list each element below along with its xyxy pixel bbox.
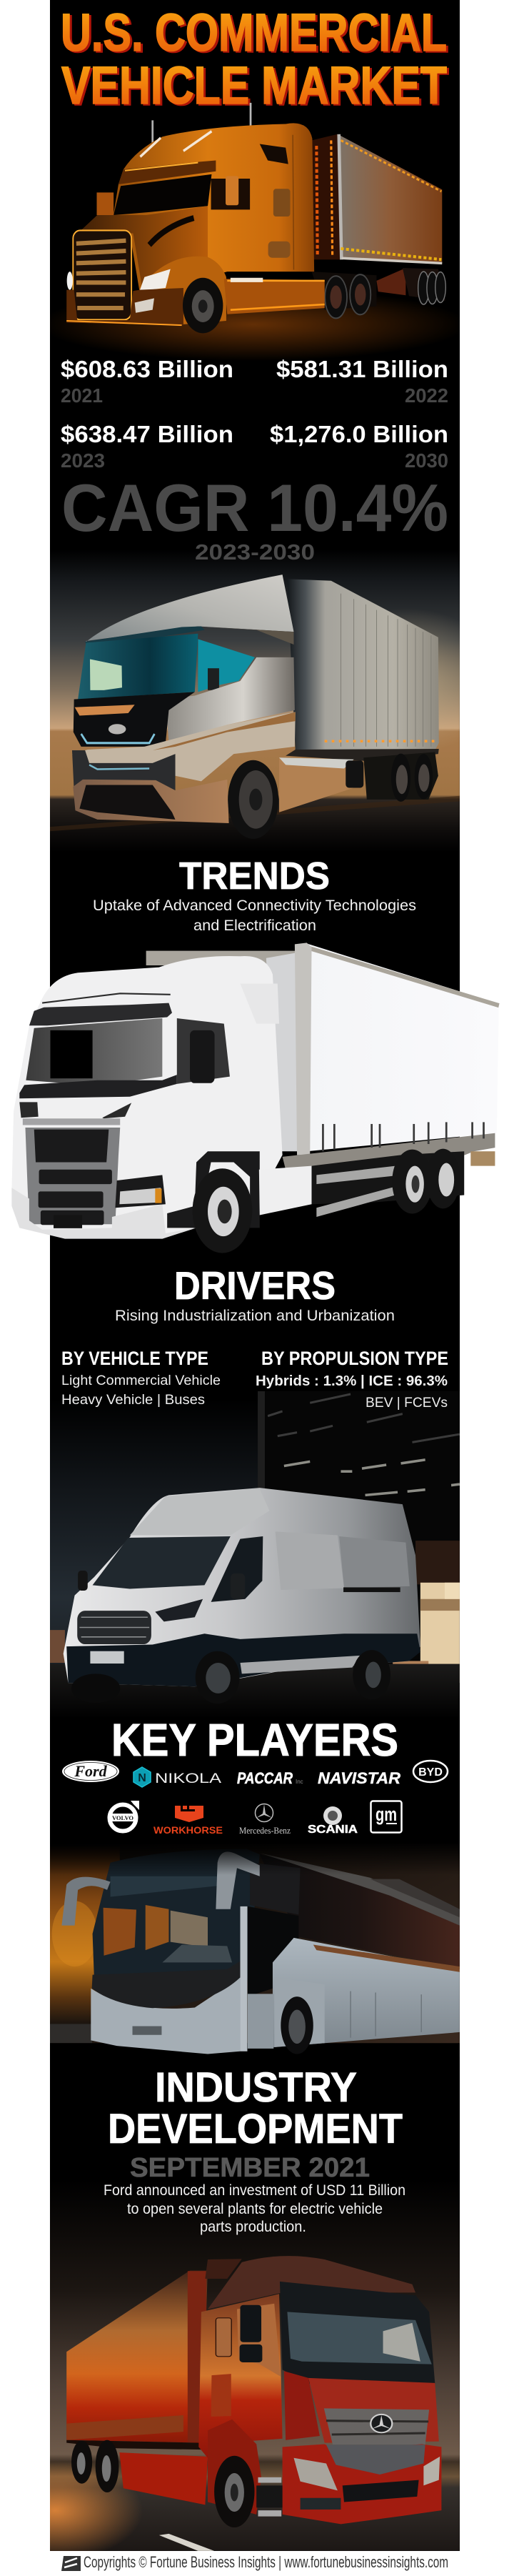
logo: Paccar: Inc (296, 1779, 303, 1785)
stat: 2030 (270, 421, 448, 472)
logo: Workhorse (153, 1806, 223, 1836)
heading: drivers (115, 1263, 395, 1324)
logo: Ford: Ford (74, 1762, 108, 1780)
image: silver futuristic truck (50, 559, 460, 840)
stat: 2022: $581.31 Billion (276, 356, 448, 382)
text: development description (104, 2182, 405, 2235)
logo: Nikola: NIKOLA (155, 1771, 221, 1786)
heading: industry development: INDUSTRY (155, 2064, 357, 2111)
text: by propulsion type (256, 1348, 448, 1411)
logo: Mercedes-Benz (239, 1804, 291, 1836)
heading: industry development: DEVELOPMENT (108, 2106, 403, 2152)
logo: Navistar: NAVISTAR (318, 1769, 400, 1787)
logo: BYD (413, 1761, 448, 1782)
logo: Scania: SCANIA (308, 1824, 358, 1836)
logo: Paccar: PACCAR (237, 1769, 293, 1787)
stat: 2022 (276, 356, 448, 407)
stat: 2022: 2022 (405, 384, 448, 407)
logo: Mercedes-Benz: Mercedes-Benz (239, 1825, 291, 1836)
logo: GM (371, 1801, 401, 1832)
text: september 2021 (104, 2153, 405, 2235)
text: by vehicle type: Light Commercial Vehicle (61, 1373, 221, 1388)
stat: 2021: 2021 (61, 384, 103, 407)
footer (61, 2553, 448, 2571)
text: development description: Ford announced an investment of USD 11 Billion (104, 2182, 405, 2199)
icon: fortune business insights logo (61, 2556, 81, 2571)
market size values (61, 356, 448, 472)
stat: 2030: 2030 (405, 449, 448, 472)
stat: 2023: 2023 (61, 449, 105, 472)
logo: Nikola (133, 1767, 221, 1787)
text: drivers description: Rising Industrialization and Urbanization (115, 1308, 395, 1324)
text: september 2021: SEPTEMBER 2021 (130, 2153, 370, 2183)
image: red truck (50, 2212, 460, 2551)
logo: Workhorse: WORKHORSE (153, 1825, 223, 1836)
image: coach bus (50, 1842, 460, 2068)
stat: 2021: $608.63 Billion (61, 356, 233, 382)
text: by vehicle type (61, 1348, 221, 1408)
text: by propulsion type: BY PROPULSION TYPE (261, 1348, 448, 1369)
background panel (50, 0, 460, 2551)
logo: Scania (308, 1806, 358, 1836)
title (61, 3, 447, 115)
heading: industry development (108, 2064, 403, 2152)
text: trends description: Uptake of Advanced Connectivity Technologies (93, 897, 416, 914)
heading: trends (93, 855, 416, 934)
logos: key players (62, 1761, 448, 1836)
heading: trends: TRENDS (179, 855, 330, 897)
CAGR: CAGR 10.4% (61, 470, 448, 545)
image: white box truck (11, 943, 499, 1253)
logo: Nikola: N (138, 1772, 146, 1784)
text: by propulsion type: Hybrids : 1.3% | ICE : 96.3% (256, 1373, 448, 1389)
stat: 2023 (61, 421, 233, 472)
text: development description: to open several plants for electric vehicle (127, 2201, 383, 2217)
logo: Ford (62, 1761, 119, 1782)
image: silver van in warehouse (50, 1391, 460, 1719)
text: trends description: and Electrification (193, 917, 316, 934)
stat: 2021 (61, 356, 233, 407)
logo: Volvo: VOLVO (112, 1814, 133, 1821)
text: by vehicle type: BY VEHICLE TYPE (61, 1348, 208, 1369)
stat: 2030: $1,276.0 Billion (270, 421, 448, 447)
heading: drivers: DRIVERS (174, 1263, 336, 1308)
logo: GM: gm (376, 1804, 397, 1825)
text: trends description (93, 897, 416, 934)
logo: Volvo (109, 1801, 139, 1831)
CAGR: 2023-2030 (195, 539, 315, 565)
text: by vehicle type: Heavy Vehicle | Buses (61, 1393, 205, 1408)
logo: BYD: BYD (418, 1766, 443, 1779)
text: development description: parts production. (200, 2219, 306, 2235)
text: by propulsion type: BEV | FCEVs (366, 1396, 448, 1411)
stat: 2023: $638.47 Billion (61, 421, 233, 447)
heading: key players: KEY PLAYERS (111, 1714, 398, 1766)
image: orange semi truck (39, 103, 468, 361)
